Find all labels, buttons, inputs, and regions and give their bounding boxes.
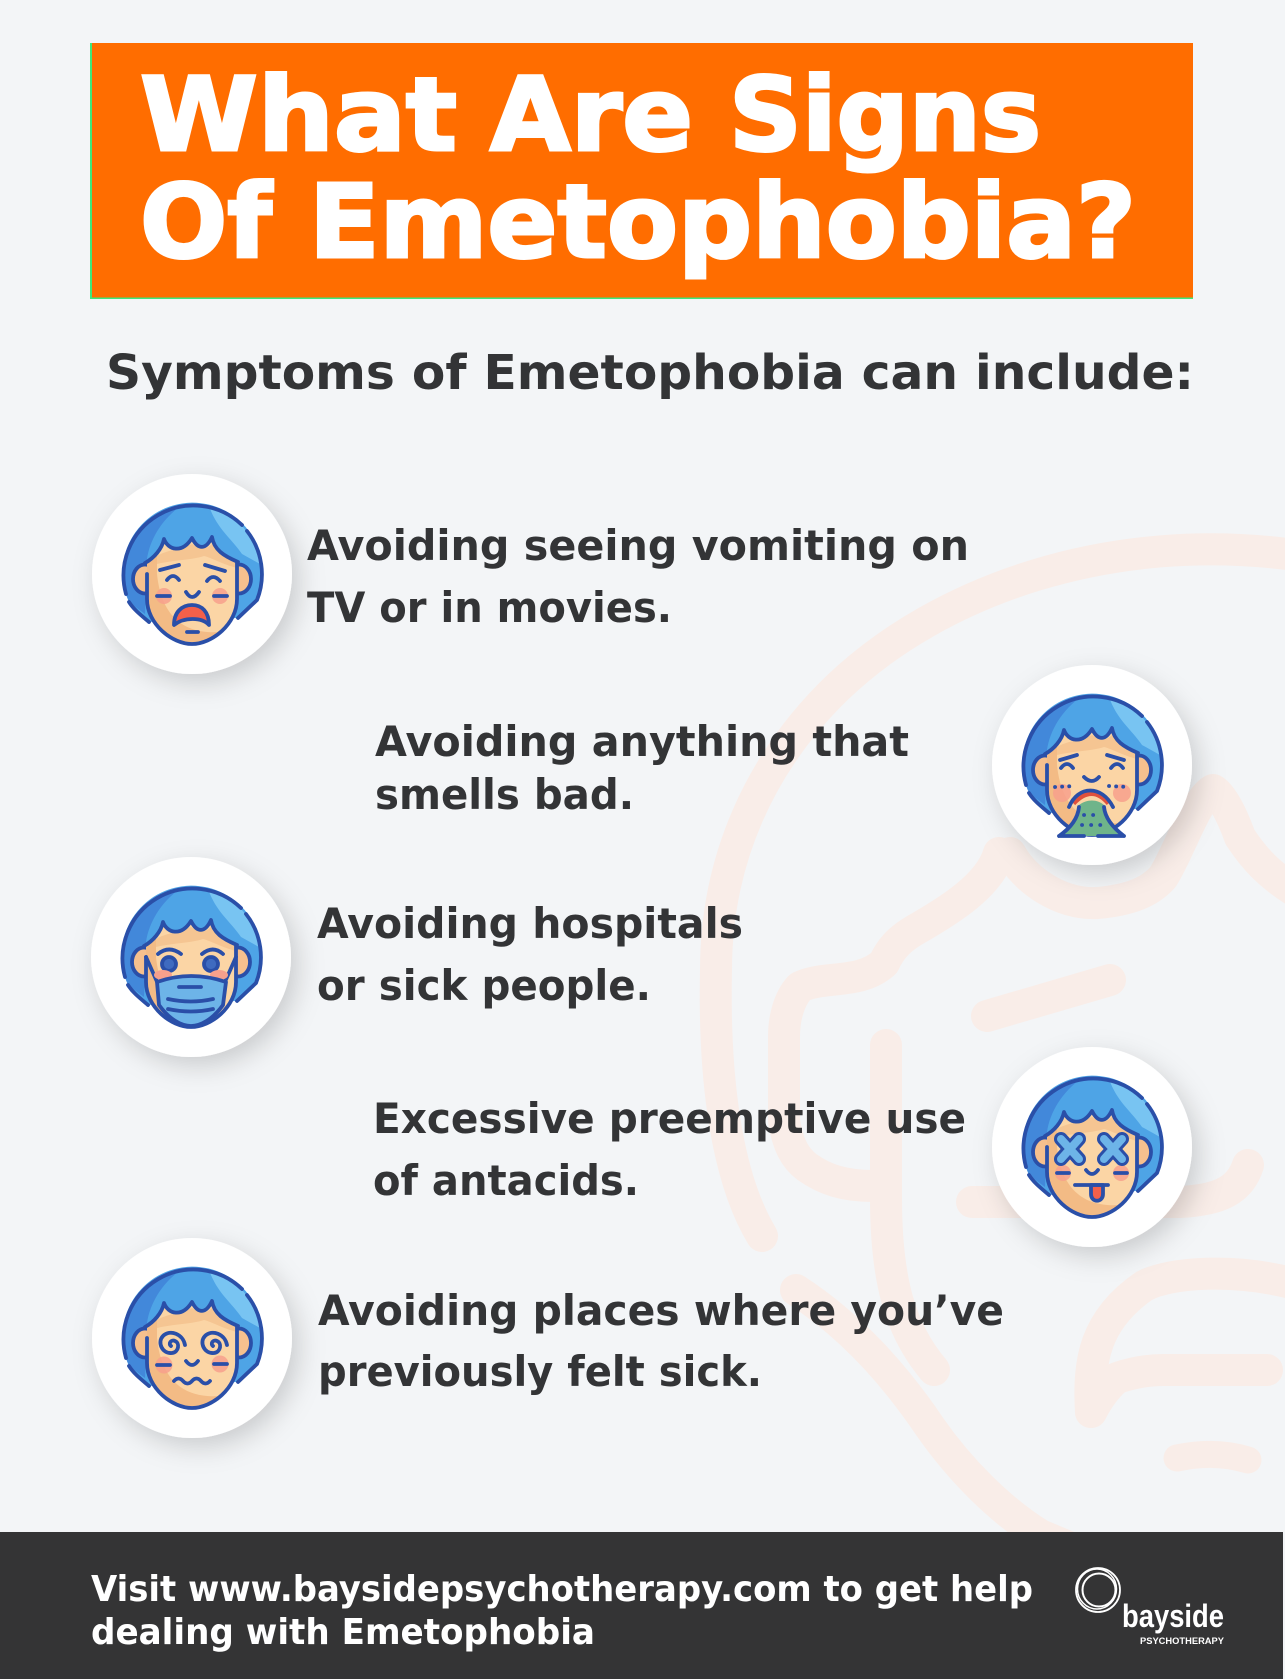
text: avoiding seeing vomiting <box>307 521 969 632</box>
text: avoiding hospitals: or sick people. <box>317 961 651 1010</box>
icon: vomiting face <box>992 665 1192 865</box>
icon: face with surgical mask <box>91 857 291 1057</box>
logo: bayside psychotherapy: PSYCHOTHERAPY <box>1140 1636 1224 1646</box>
icon: disgusted face <box>92 474 292 674</box>
footer bar <box>0 1532 1283 1679</box>
text: excessive antacids: Excessive preemptive use <box>373 1094 966 1143</box>
title line 1: Are <box>490 56 693 175</box>
text: avoiding bad smells <box>375 717 909 819</box>
background watermark: large sick face line art <box>716 549 1285 1560</box>
footer call to action <box>91 1569 1033 1653</box>
icon: dizzy face with crossed eyes and tongue out <box>992 1047 1192 1247</box>
subheading: Symptoms of Emetophobia can include: <box>106 345 1194 401</box>
text: avoiding places <box>318 1286 1004 1396</box>
text: avoiding bad smells: Avoiding anything that <box>375 717 909 766</box>
text: excessive antacids: of antacids. <box>373 1156 639 1205</box>
logo: bayside psychotherapy: bayside <box>1122 1598 1224 1634</box>
title line 2: Emetophobia? <box>309 163 1136 282</box>
title line 2: Of <box>140 163 274 282</box>
text: avoiding places: Avoiding places where you’ve <box>318 1286 1004 1335</box>
footer call to action: Visit www.baysidepsychotherapy.com to get help <box>91 1569 1033 1610</box>
text: avoiding seeing vomiting: Avoiding seeing vomiting on <box>307 521 969 570</box>
text: avoiding bad smells: smells bad. <box>375 770 634 819</box>
text: avoiding hospitals: Avoiding hospitals <box>317 899 743 948</box>
title line 1 <box>140 56 1041 175</box>
text: avoiding seeing vomiting: TV or in movies. <box>307 583 672 632</box>
title banner <box>90 43 1193 299</box>
title line 1: What <box>140 56 457 175</box>
text: excessive antacids <box>373 1094 966 1205</box>
text: avoiding hospitals <box>317 899 743 1010</box>
footer call to action: dealing with Emetophobia <box>91 1612 595 1653</box>
text: avoiding places: previously felt sick. <box>318 1347 762 1396</box>
icon: dizzy face with spiral eyes <box>92 1238 292 1438</box>
logo: bayside psychotherapy <box>1076 1568 1224 1646</box>
title line 1: Signs <box>729 56 1041 175</box>
